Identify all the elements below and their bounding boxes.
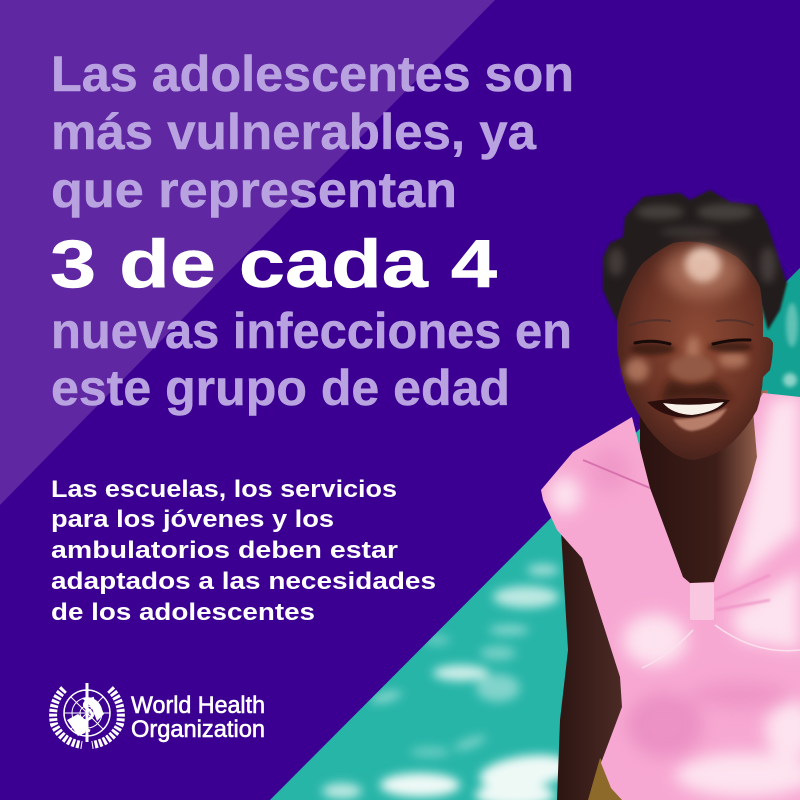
WHO logo	[53, 683, 265, 745]
heading: este grupo de edad	[51, 360, 510, 416]
body text: de los adolescentes	[51, 599, 315, 626]
body text: ambulatorios deben estar	[51, 537, 398, 564]
brows and eyes	[630, 320, 753, 325]
neck	[640, 390, 768, 600]
heading: Las adolescentes son	[51, 46, 574, 102]
hair	[603, 190, 787, 330]
face	[617, 242, 773, 460]
arm	[557, 530, 622, 800]
teal photo panel	[270, 268, 800, 800]
icon: WHO emblem	[53, 683, 121, 745]
heading: más vulnerables, ya	[51, 104, 537, 160]
pink shirt	[541, 393, 800, 800]
heading: que representan	[51, 162, 457, 218]
photo: smiling girl	[541, 190, 800, 800]
heading: nuevas infecciones en	[51, 303, 572, 359]
body text	[51, 476, 436, 626]
body text: para los jóvenes y los	[51, 506, 334, 533]
logo wordmark: Organization	[131, 716, 265, 743]
lighter purple diagonal panel	[0, 0, 495, 505]
mouth	[647, 398, 730, 418]
cheek light	[625, 336, 748, 382]
logo wordmark: World Health	[131, 692, 265, 719]
skirt	[588, 758, 630, 800]
body text: Las escuelas, los servicios	[51, 476, 397, 503]
heading	[50, 46, 574, 416]
body text: adaptados a las necesidades	[51, 568, 436, 595]
nose and shadow	[660, 380, 733, 402]
key statistic: 3 de cada 4	[50, 226, 497, 302]
forehead highlight	[685, 248, 721, 282]
logo wordmark	[131, 692, 265, 743]
shirt knot	[690, 583, 714, 620]
